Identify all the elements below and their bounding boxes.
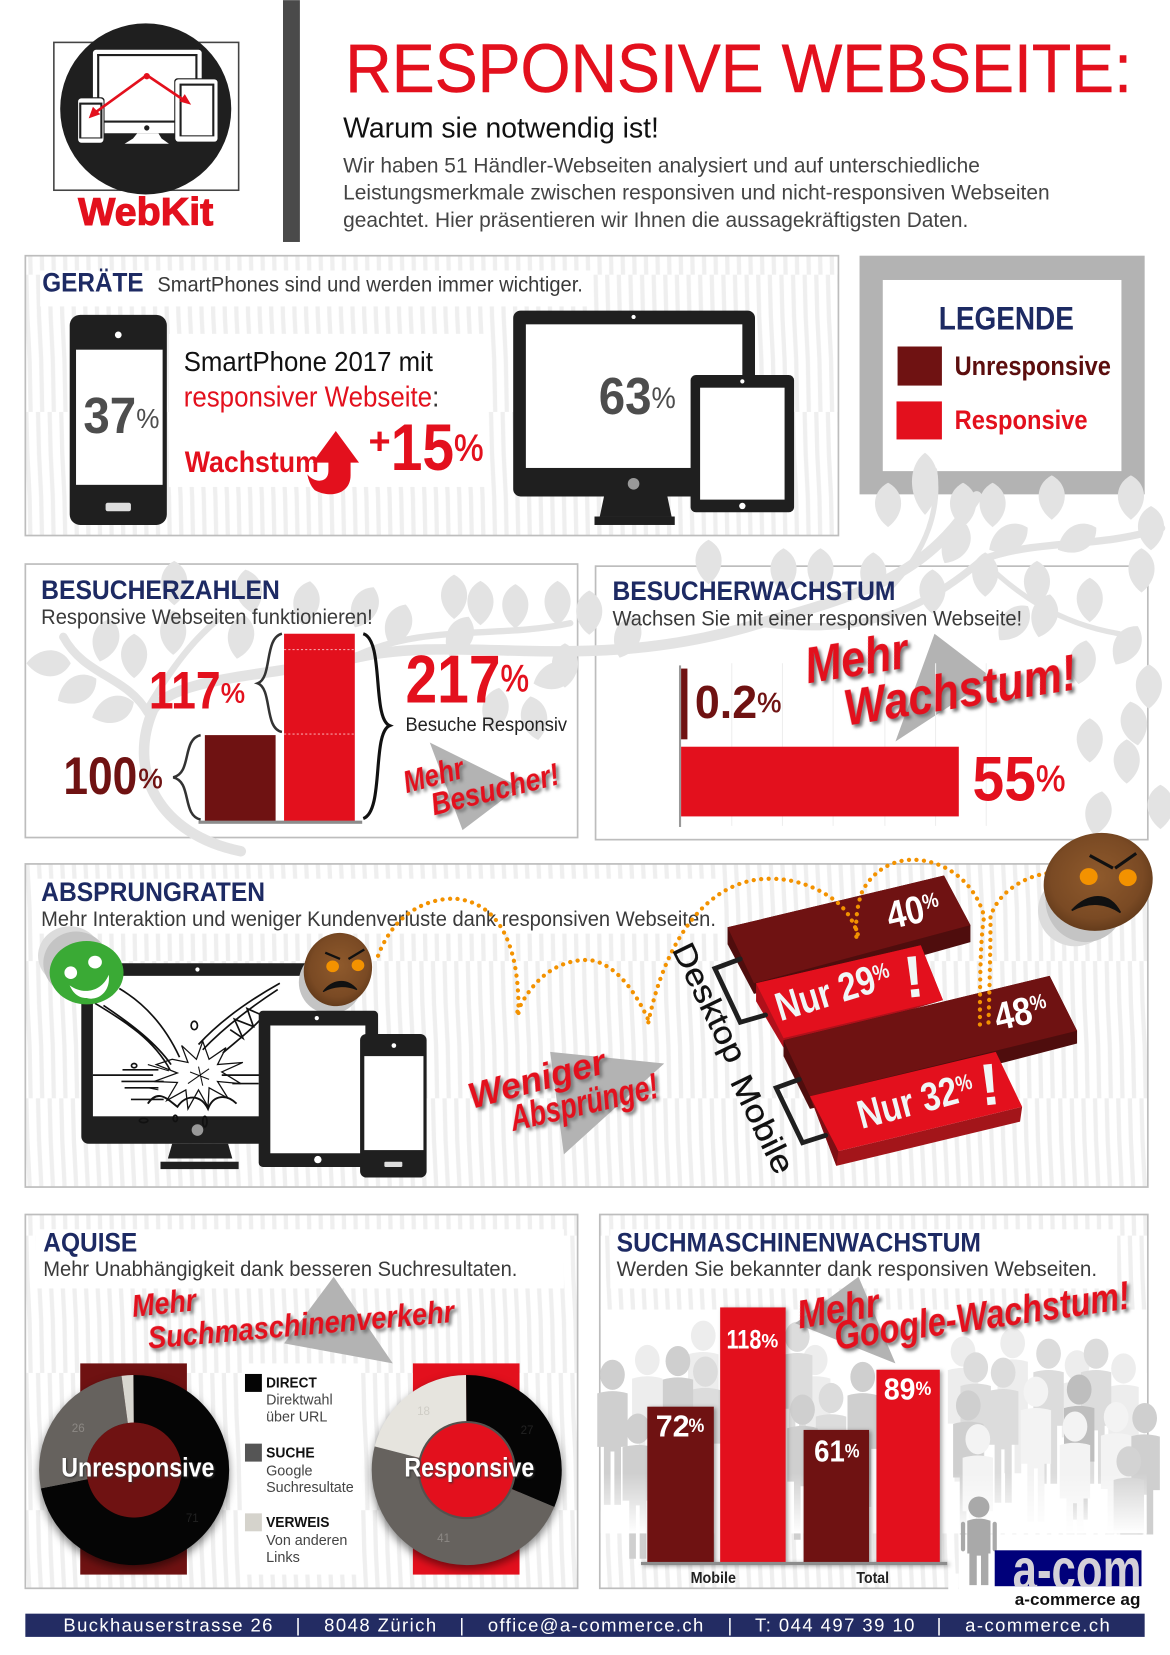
- text: responsiver Webseite: responsiver Webseite:: [184, 382, 439, 414]
- chart legend: Von anderen: [266, 1533, 347, 1549]
- panel backgrounds: [25, 256, 1148, 1588]
- value: +15%: 15: [391, 411, 454, 484]
- callout: Mehr Wachstum: Mehr: [801, 621, 914, 694]
- bar chart: [641, 1307, 947, 1565]
- value labels: 118: [726, 1325, 761, 1355]
- intro paragraph: geachtet. Hier präsentieren wir Ihnen die aussagekräftigsten Daten.: [343, 209, 968, 232]
- value: 217%: 217: [405, 642, 501, 717]
- heading: GERÄTE: [42, 268, 144, 298]
- donut chart: unresponsive: Unresponsive: [61, 1452, 214, 1482]
- donut chart: unresponsive: 26: [72, 1422, 85, 1435]
- footer bar: |: [296, 1615, 300, 1636]
- braces: [173, 634, 390, 820]
- icon: angry face small: [294, 923, 382, 1016]
- heading text: SmartPhones sind und werden immer wichtiger.: [157, 274, 583, 297]
- footer bar: Buckhauserstrasse 26: [63, 1615, 272, 1636]
- bar: desktop unresponsive: 40: [882, 887, 929, 938]
- white info box: [169, 334, 488, 487]
- chart legend: Links: [266, 1550, 300, 1566]
- text: Wachstum: Wachstum: [185, 446, 319, 479]
- value labels: [656, 1325, 931, 1469]
- bar: mobile responsive: Nur 32: [852, 1068, 963, 1137]
- value: +15%: %: [454, 428, 484, 469]
- heading: ABSPRUNGRATEN: [41, 877, 265, 907]
- bar: mobile unresponsive: %: [1028, 990, 1049, 1016]
- footer bar: office@a-commerce.ch: [488, 1615, 703, 1636]
- chart legend: DIRECT: [266, 1376, 317, 1392]
- icon: tablet: [259, 1011, 378, 1167]
- icon: curved arrow: [307, 431, 359, 494]
- callout: Mehr Wachstum: [801, 621, 1080, 736]
- heading: BESUCHERWACHSTUM: [612, 576, 895, 606]
- panel: Geräte content: [42, 268, 794, 525]
- footer bar: [25, 1614, 1145, 1637]
- label: Desktop: Desktop: [665, 937, 754, 1068]
- intro paragraph: Leistungsmerkmale zwischen responsiven und nicht-responsiven Webseiten: [343, 182, 1050, 205]
- arrow: mehr besucher: [430, 742, 520, 830]
- title: RESPONSIVE WEBSEITE:: [345, 30, 1132, 107]
- callout: Mehr Suchmaschinenverkehr: Suchmaschinenverkehr: [146, 1293, 457, 1356]
- panel: legend: [860, 256, 1145, 494]
- callout: Weniger Absprünge: Weniger: [464, 1041, 612, 1117]
- bar: mobile unresponsive: [784, 976, 1077, 1109]
- value labels: %: [845, 1441, 860, 1462]
- value: 100%: 100: [63, 747, 137, 806]
- logo phone: [77, 97, 105, 144]
- donut chart: unresponsive: 71: [186, 1512, 199, 1525]
- arrow: dotted bounces over bars: [648, 860, 1046, 1027]
- subtitle: Warum sie notwendig ist!: [343, 112, 659, 144]
- icon: monitor 63%: %: [652, 382, 676, 415]
- logo: WebKit: [54, 23, 239, 194]
- value: +15%: [369, 411, 484, 484]
- chart legend: SUCHE: [266, 1445, 315, 1461]
- heading text: Wachsen Sie mit einer responsiven Webseite!: [612, 607, 1022, 630]
- chart legend: [243, 1363, 359, 1575]
- icon: angry face large: [1033, 821, 1164, 946]
- logo box: [995, 1550, 1141, 1586]
- value: 0.2%: %: [757, 687, 781, 718]
- arrow: first dotted bounces: [378, 899, 649, 1022]
- icon: smartphone 37%: 37: [83, 387, 136, 444]
- arrow: weniger absprünge: [550, 1052, 664, 1154]
- bar: mobile unresponsive: 48: [990, 988, 1036, 1039]
- footer bar: |: [728, 1615, 732, 1636]
- callout: Weniger Absprünge: Absprünge!: [505, 1066, 662, 1139]
- chart legend: Google: [266, 1463, 313, 1479]
- bar: desktop responsive: !: [900, 942, 927, 1011]
- donut chart: responsive: Responsive: [404, 1452, 534, 1482]
- bar chart: [199, 634, 362, 824]
- legend swatch responsive: [897, 401, 942, 439]
- legend label responsive: Responsive: [955, 405, 1088, 435]
- chart legend: Direktwahl: [266, 1393, 333, 1409]
- footer bar: a-commerce.ch: [965, 1615, 1110, 1636]
- bar: mobile responsive: %: [953, 1070, 975, 1098]
- icon: phone: [360, 1034, 427, 1178]
- value labels: 72: [656, 1409, 690, 1443]
- value: 100%: %: [138, 763, 163, 794]
- arrow: mehr verkehr: [284, 1277, 393, 1363]
- callout: Mehr Wachstum: Wachstum!: [840, 643, 1080, 736]
- icon: smartphone 37%: %: [136, 403, 159, 434]
- legend swatch unresponsive: [898, 347, 942, 386]
- callout: Weniger Absprünge: [464, 1041, 662, 1139]
- chart: 3D bounce bars: [728, 876, 1077, 1166]
- arrow: mehr wachstum: [895, 634, 993, 741]
- value: +15%: +: [369, 421, 391, 463]
- legend title: LEGENDE: [939, 300, 1074, 337]
- bar: desktop unresponsive: [728, 876, 970, 994]
- intro paragraph: [343, 154, 1050, 232]
- panel: Suchmaschinenwachstum content: [597, 1227, 1160, 1591]
- chart legend: Suchresultate: [266, 1480, 354, 1496]
- logo caption: a-commerce ag: [1015, 1591, 1140, 1609]
- label: Besuche Responsiv: Besuche Responsiv: [405, 714, 567, 736]
- logo arrows: [89, 73, 191, 118]
- heading text: Mehr Interaktion und weniger Kundenverluste dank responsiven Webseiten.: [41, 908, 716, 931]
- axis labels: Mobile: [691, 1570, 736, 1587]
- callout: Mehr Suchmaschinenverkehr: Mehr: [130, 1281, 199, 1324]
- donut chart: responsive: 27: [521, 1424, 534, 1437]
- donut chart: unresponsive: [61, 1363, 214, 1575]
- decorative tree: [26, 453, 1170, 851]
- bar chart: [679, 663, 986, 827]
- bar: mobile responsive: [810, 1050, 1022, 1166]
- crowd background: [597, 1321, 1160, 1591]
- logo wordmark: WebKit: [78, 191, 213, 234]
- heading: AQUISE: [43, 1227, 137, 1257]
- donut chart: responsive: 18: [417, 1405, 430, 1418]
- axis labels: [691, 1570, 889, 1587]
- header divider: [283, 0, 300, 242]
- panel: Absprungraten content: [38, 821, 1164, 1179]
- logo tablet: [174, 78, 219, 143]
- donut chart: responsive: 41: [437, 1532, 450, 1545]
- brackets: [715, 959, 826, 1143]
- company logo: [948, 1496, 1170, 1614]
- callout: Mehr Besucher: Mehr: [399, 749, 469, 800]
- heading: BESUCHERZAHLEN: [41, 575, 280, 605]
- icon: smartphone 37%: [70, 315, 167, 525]
- footer bar: T: 044 497 39 10: [755, 1615, 914, 1636]
- heading text: Responsive Webseiten funktionieren!: [41, 606, 373, 629]
- axis labels: Total: [856, 1570, 889, 1587]
- callout: Mehr Besucher: Besucher!: [427, 756, 563, 822]
- donut chart: responsive: [395, 1363, 538, 1575]
- value: 217%: %: [501, 658, 529, 700]
- value labels: %: [688, 1416, 704, 1437]
- value: 55%: 55: [973, 745, 1036, 815]
- icon: monitor with splash: [81, 963, 335, 1169]
- icon: smiley: [38, 926, 124, 1004]
- logo monitor: [93, 50, 202, 144]
- icon: tablet: [691, 375, 794, 512]
- bar: desktop responsive: %: [870, 959, 892, 986]
- heading: SUCHMASCHINENWACHSTUM: [617, 1227, 981, 1257]
- value: 117%: %: [221, 677, 245, 708]
- value labels: 61: [814, 1435, 845, 1469]
- value: 117%: 117: [149, 662, 221, 721]
- bar: desktop unresponsive: %: [920, 888, 941, 915]
- value labels: 89: [884, 1372, 916, 1406]
- footer bar: |: [459, 1615, 464, 1636]
- value labels: %: [916, 1379, 931, 1400]
- icon: monitor 63%: [513, 311, 755, 525]
- value: 0.2%: 0.2: [695, 676, 757, 728]
- value: 55%: %: [1036, 759, 1065, 799]
- footer bar: 8048 Zürich: [324, 1615, 436, 1636]
- legend label unresponsive: Unresponsive: [955, 351, 1111, 381]
- bar: desktop responsive: Nur 29: [770, 957, 881, 1030]
- chart legend: über URL: [266, 1409, 327, 1425]
- callout: Mehr Google-Wachstum: Mehr: [794, 1280, 884, 1337]
- heading text: Werden Sie bekannter dank responsiven Webseiten.: [617, 1258, 1097, 1281]
- panel: Aquise content: [43, 1227, 538, 1575]
- arrow: mehr google wachstum: [795, 1277, 895, 1363]
- bar: desktop responsive: [756, 942, 943, 1048]
- icon: monitor 63%: 63: [599, 367, 652, 425]
- panel: Besucherzahlen content: [41, 575, 567, 830]
- value labels: %: [761, 1332, 778, 1353]
- heading text: Mehr Unabhängigkeit dank besseren Suchresultaten.: [43, 1258, 517, 1281]
- intro paragraph: Wir haben 51 Händler-Webseiten analysiert und auf unterschiedliche: [343, 154, 980, 177]
- chart legend: VERWEIS: [266, 1515, 330, 1531]
- footer bar: |: [937, 1615, 941, 1636]
- label: Mobile: Mobile: [723, 1069, 802, 1179]
- text: SmartPhone 2017: SmartPhone 2017 mit: [184, 346, 433, 377]
- bar: mobile responsive: !: [976, 1050, 1003, 1119]
- icon: person: [961, 1496, 997, 1585]
- panel: Besucherwachstum content: [612, 576, 1080, 827]
